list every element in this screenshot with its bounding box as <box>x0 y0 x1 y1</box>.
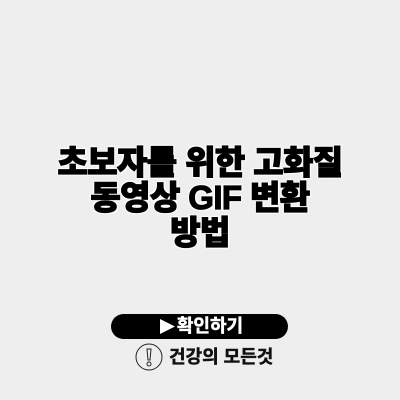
title: 초보자를 위한 고화질 <box>58 144 342 181</box>
button: confirm <box>111 314 288 339</box>
icon: play triangle <box>160 319 175 334</box>
button label: 확인하기 <box>177 316 243 336</box>
title <box>57 144 342 251</box>
caption text: 건강의 모든것 <box>169 347 273 367</box>
title: 방법 <box>170 214 230 251</box>
caption with icon <box>136 344 273 370</box>
icon: exclamation circle <box>136 344 162 370</box>
title: 동영상 GIF 변환 <box>90 179 310 216</box>
